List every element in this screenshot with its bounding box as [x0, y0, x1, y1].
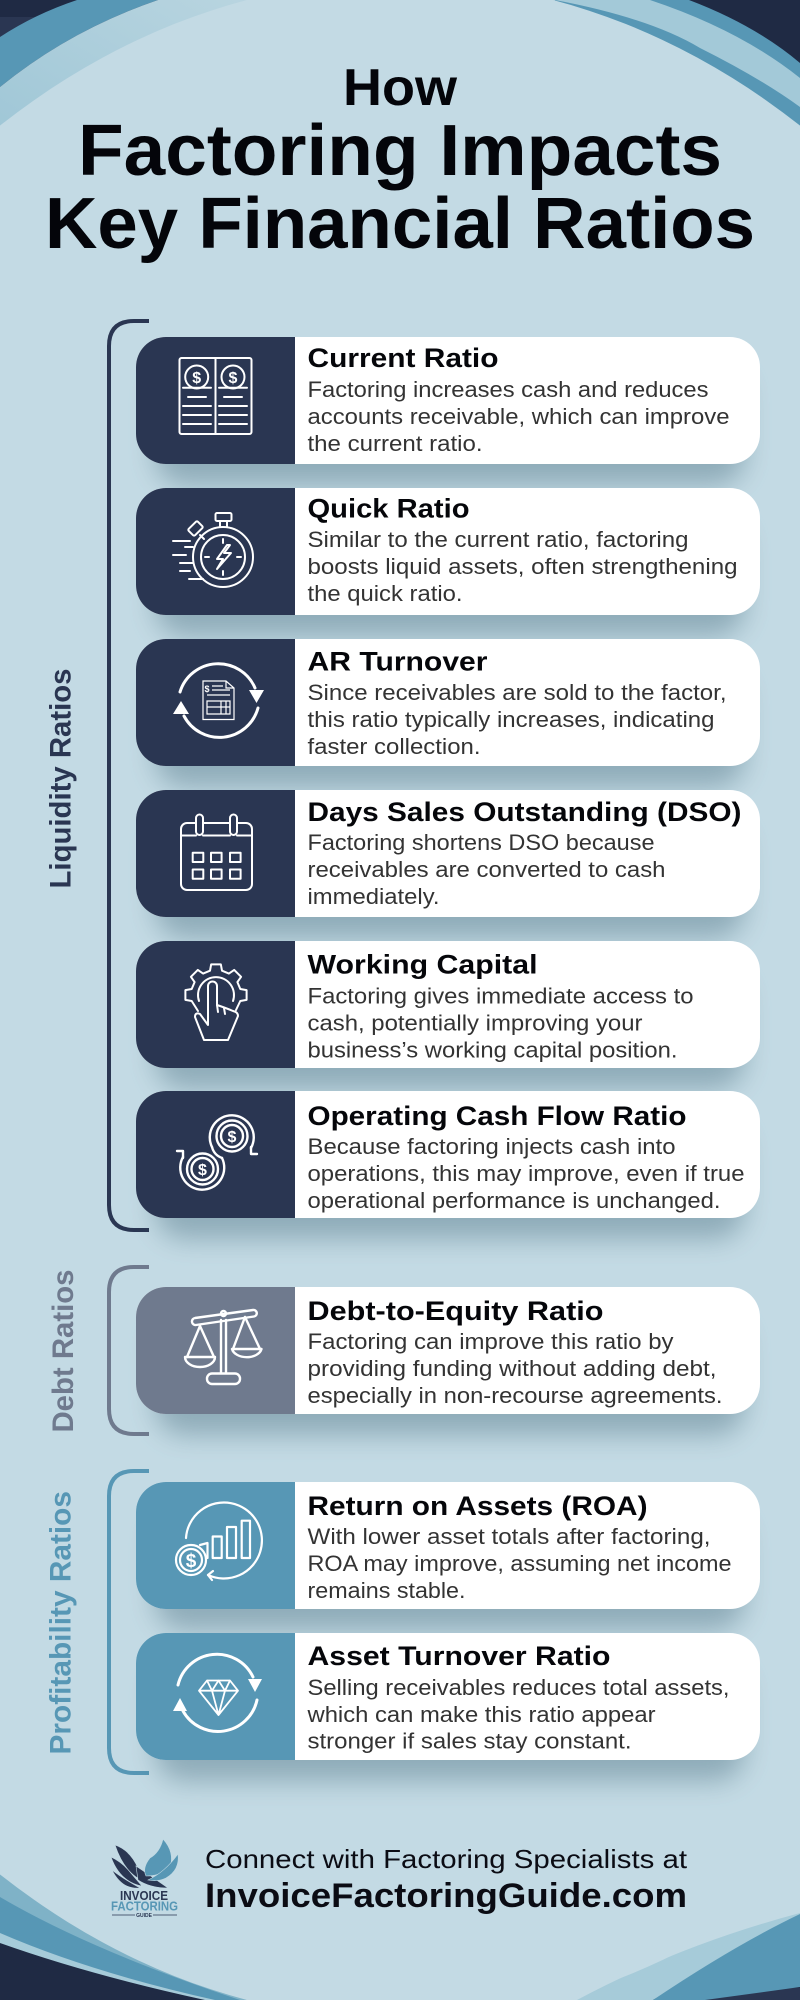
heading: Asset Turnover Ratio	[308, 1641, 610, 1671]
description	[308, 527, 738, 606]
bracket: debt	[109, 1267, 149, 1434]
description: immediately.	[308, 884, 440, 909]
heading: Operating Cash Flow Ratio	[308, 1101, 686, 1131]
heading: Debt-to-Equity Ratio	[308, 1296, 604, 1326]
logo: Invoice Factoring Guide eagle: FACTORING	[111, 1899, 178, 1914]
heading: Working Capital	[308, 950, 538, 980]
title line: Factoring Impacts: Factoring Impacts	[78, 111, 722, 191]
heading: Days Sales Outstanding (DSO)	[308, 797, 742, 827]
card: Days Sales Outstanding	[136, 790, 760, 938]
card: Working Capital	[136, 941, 760, 1089]
card: AR Turnover	[136, 639, 760, 787]
icon: ledger with dollar coins: $	[229, 370, 238, 387]
icon: two coins with flow arrows: $	[198, 1162, 207, 1179]
footer website: InvoiceFactoringGuide.com	[205, 1877, 687, 1915]
title	[45, 59, 755, 264]
icon: stopwatch	[173, 513, 253, 587]
description: especially in non-recourse agreements.	[308, 1383, 722, 1408]
section label: Liquidity Ratios: Liquidity Ratios	[44, 668, 78, 888]
description: the quick ratio.	[308, 581, 462, 606]
bracket: liquidity	[109, 321, 149, 1230]
heading: Current Ratio	[308, 343, 498, 373]
description: accounts receivable, which can improve	[308, 404, 730, 429]
description: Factoring increases cash and reduces	[308, 377, 708, 402]
description	[308, 984, 694, 1062]
description: business’s working capital position.	[308, 1038, 678, 1062]
description	[306, 1675, 730, 1754]
icon: coin with growth bars	[176, 1502, 262, 1580]
description: providing funding without adding debt,	[308, 1356, 716, 1381]
icon: ledger with dollar coins: $	[192, 370, 201, 387]
description	[308, 830, 666, 909]
description: this ratio typically increases, indicating	[308, 707, 714, 732]
description: operational performance is unchanged.	[308, 1188, 720, 1213]
description: boosts liquid assets, often strengthening	[308, 554, 738, 579]
logo: Invoice Factoring Guide eagle: INVOICE	[120, 1889, 168, 1903]
description: Since receivables are sold to the factor,	[308, 680, 726, 705]
heading: Return on Assets (ROA)	[308, 1491, 648, 1521]
icon: two coins with flow arrows	[177, 1115, 257, 1190]
description: which can make this ratio appear	[306, 1702, 656, 1727]
description: cash, potentially improving your	[308, 1010, 643, 1036]
icon: coin with growth bars: $	[186, 1551, 197, 1572]
heading: Quick Ratio	[308, 494, 470, 524]
icon: ledger with dollar coins	[180, 358, 252, 434]
footer line: Connect with Factoring Specialists at	[205, 1844, 688, 1874]
card: Asset Turnover Ratio	[136, 1633, 760, 1781]
description: With lower asset totals after factoring,	[308, 1524, 710, 1549]
description	[308, 377, 730, 456]
icon: document with cycle arrows: $	[204, 684, 210, 694]
card: Return on Assets	[136, 1482, 760, 1630]
description: remains stable.	[308, 1578, 466, 1603]
description	[308, 1134, 744, 1213]
icon: calendar	[181, 814, 252, 890]
icon: diamond with cycle arrows	[173, 1654, 262, 1731]
card: Quick Ratio	[136, 488, 760, 636]
description: Factoring can improve this ratio by	[308, 1329, 674, 1354]
description: receivables are converted to cash	[308, 857, 666, 882]
icon: two coins with flow arrows: $	[228, 1129, 237, 1146]
description: Similar to the current ratio, factoring	[308, 527, 688, 552]
section label: Debt Ratios: Debt Ratios	[47, 1270, 80, 1432]
description: ROA may improve, assuming net income	[308, 1551, 732, 1576]
card: Debt-to-Equity Ratio	[136, 1287, 760, 1435]
bracket: profitability	[109, 1471, 149, 1773]
description: stronger if sales stay constant.	[308, 1728, 632, 1754]
section label: Profitability Ratios: Profitability Ratios	[44, 1491, 78, 1754]
title line: Key Financial Ratios: Key Financial Ratios	[45, 184, 755, 264]
description: Selling receivables reduces total assets,	[308, 1675, 730, 1700]
title line: How: How	[343, 59, 458, 117]
description	[308, 1329, 722, 1408]
description: faster collection.	[308, 734, 480, 759]
description: the current ratio.	[308, 431, 482, 456]
description: Because factoring injects cash into	[308, 1134, 676, 1159]
heading: AR Turnover	[308, 646, 488, 676]
footer call to action	[205, 1844, 688, 1915]
description: Factoring gives immediate access to	[308, 984, 694, 1008]
logo: Invoice Factoring Guide eagle	[111, 1839, 178, 1919]
icon: balance scale	[185, 1310, 262, 1384]
card: Operating Cash Flow Ratio	[136, 1091, 760, 1239]
icon: gear with pointing hand	[185, 964, 247, 1040]
description: Factoring shortens DSO because	[308, 830, 654, 855]
description	[308, 1524, 732, 1603]
logo: Invoice Factoring Guide eagle: GUIDE	[136, 1913, 153, 1919]
description	[308, 680, 726, 759]
icon: document with cycle arrows	[173, 664, 264, 737]
card: Current Ratio	[136, 337, 760, 485]
description: operations, this may improve, even if true	[308, 1161, 744, 1186]
